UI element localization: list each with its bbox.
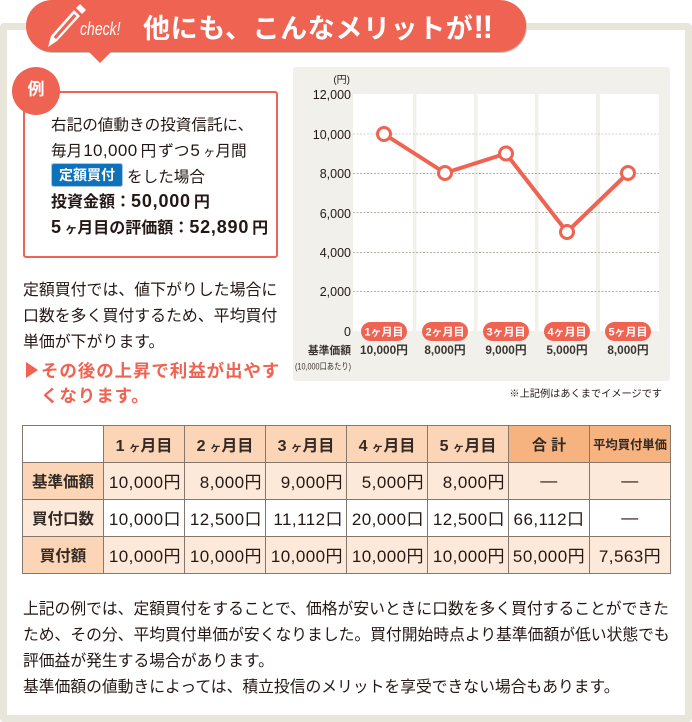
comparison table [22, 425, 671, 574]
comparison table: 10,000円 [271, 547, 343, 566]
comparison table: — [621, 508, 639, 526]
comparison table: — [540, 470, 558, 490]
comparison table: 66,112口 [514, 510, 584, 529]
banner pointer [89, 52, 111, 63]
comparison table: 10,000円 [190, 547, 262, 566]
base price row: 9,000円 [485, 343, 527, 357]
data points [378, 128, 634, 238]
comparison table: — [621, 470, 639, 490]
description text: 口数を多く買付するため、平均買付 [23, 308, 277, 325]
badge: example [12, 67, 60, 115]
comparison table: 3 ヶ月目 [278, 438, 334, 455]
month pills: 1ヶ月目 [364, 326, 404, 338]
example text: をした場合 [127, 169, 205, 186]
footer text: 上記の例では、定額買付をすることで、価格が安いときに口数を多く買付することができた [23, 601, 669, 618]
badge: fixed-amount purchase [51, 163, 123, 187]
y axis labels: (円) [333, 75, 350, 86]
base price row: 8,000円 [424, 343, 466, 357]
comparison table: 基準価額 [32, 474, 94, 491]
y axis labels: 0 [344, 325, 351, 339]
example text: 右記の値動きの投資信託に、 [51, 117, 253, 134]
y axis labels: 12,000 [313, 88, 351, 102]
y axis labels: 2,000 [320, 285, 351, 299]
comparison table: 2 ヶ月目 [197, 438, 253, 455]
y axis labels: 4,000 [320, 246, 351, 260]
banner pill [26, 0, 526, 52]
chart columns [353, 94, 659, 331]
badge: example: 例 [28, 80, 44, 99]
title: 他にも、こんなメリットが!! [143, 9, 492, 45]
footer text: 評価益が発生する場合があります。 [23, 653, 274, 670]
highlighted conclusion: くなります。 [41, 386, 150, 406]
example text: 投資金額：50,000円 [51, 191, 210, 211]
footer text [23, 600, 670, 696]
comparison table: 50,000円 [513, 547, 585, 566]
example text [51, 116, 268, 237]
month pills: 2ヶ月目 [425, 326, 465, 338]
base price row [295, 343, 649, 372]
line chart [293, 67, 670, 381]
footer text: 基準価額の値動きによっては、積立投信のメリットを享受できない場合もあります。 [23, 679, 620, 696]
comparison table: 10,000口 [109, 510, 181, 529]
chart background [293, 67, 670, 381]
badge: fixed-amount purchase: 定額買付 [59, 167, 115, 183]
y axis labels: 10,000 [313, 128, 351, 142]
comparison table: 8,000円 [443, 473, 505, 492]
base price row: 5,000円 [546, 343, 588, 357]
highlighted conclusion [26, 361, 280, 406]
base price row: 10,000円 [360, 343, 408, 357]
comparison table: 7,563円 [599, 547, 661, 566]
month pills: 5ヶ月目 [608, 326, 648, 338]
base price row: 基準価額 [308, 343, 351, 357]
example text: 毎月10,000円ずつ5ヶ月間 [51, 141, 247, 160]
comparison table: 10,000円 [433, 547, 505, 566]
y axis labels: 6,000 [320, 207, 351, 221]
comparison table: 買付口数 [32, 511, 94, 528]
comparison table: 12,500口 [433, 510, 505, 529]
header banner [26, 0, 527, 63]
comparison table: 10,000円 [352, 547, 424, 566]
month pills: 3ヶ月目 [486, 326, 526, 338]
comparison table: 4 ヶ月目 [359, 438, 415, 455]
example text: 5ヶ月目の評価額：52,890円 [51, 217, 268, 237]
comparison table: 1 ヶ月目 [116, 438, 172, 455]
y axis labels [313, 75, 351, 339]
comparison table: 20,000口 [352, 510, 424, 529]
data line [384, 134, 628, 232]
icon: arrow marker [26, 362, 38, 378]
month pills [361, 322, 651, 341]
description text: 単価が下がります。 [23, 334, 164, 351]
month pills: 4ヶ月目 [547, 326, 587, 338]
description text [23, 281, 277, 351]
icon: pencil [48, 4, 86, 47]
y axis labels: 8,000 [320, 167, 351, 181]
comparison table: 10,000円 [109, 473, 181, 492]
comparison table: 10,000円 [109, 547, 181, 566]
check label: check! [80, 19, 121, 39]
base price row: 8,000円 [607, 343, 649, 357]
comparison table: 11,112口 [273, 510, 343, 529]
comparison table: 5,000円 [362, 473, 424, 492]
highlighted conclusion: その後の上昇で利益が出やす [41, 361, 280, 381]
footer text: ため、その分、平均買付単価が安くなりました。買付開始時点より基準価額が低い状態でも [23, 627, 670, 644]
description text: 定額買付では、値下がりした場合に [23, 282, 277, 299]
comparison table: 8,000円 [200, 473, 262, 492]
comparison table: 合 計 [532, 436, 566, 454]
panel: example [23, 91, 278, 258]
comparison table: 9,000円 [281, 473, 343, 492]
base price row: (10,000口あたり) [295, 362, 351, 372]
comparison table: 12,500口 [190, 510, 262, 529]
comparison table: 平均買付単価 [593, 438, 667, 452]
chart note: ※上記例はあくまでイメージです [509, 389, 662, 400]
comparison table: 買付額 [40, 548, 86, 565]
comparison table: 5 ヶ月目 [440, 438, 496, 455]
